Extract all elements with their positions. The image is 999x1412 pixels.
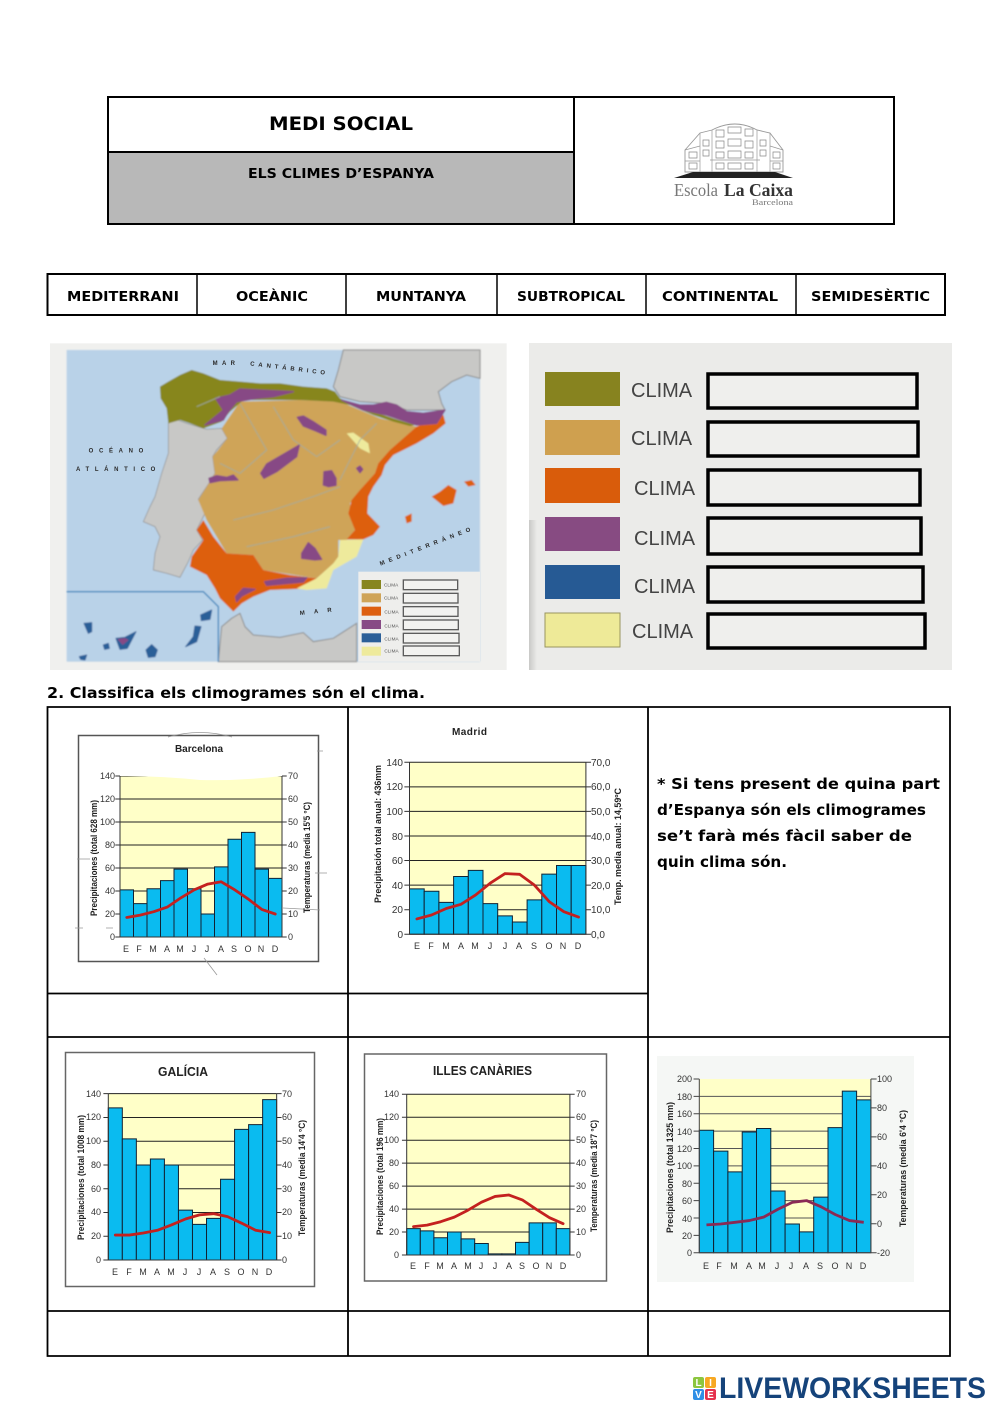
right axis labels — [877, 1074, 892, 1258]
word: semidesèrtic: SEMIDESÈRTIC — [811, 288, 930, 305]
legend swatches — [545, 372, 620, 647]
right axis labels: 50 — [288, 817, 298, 827]
logo text: Escola — [674, 180, 718, 200]
note text: quin clima són. — [657, 853, 787, 871]
chart title: ILLES CANÀRIES — [433, 1063, 532, 1078]
climograph: unnamed high rainfall — [657, 1056, 914, 1282]
watermark icon: I — [709, 1378, 712, 1389]
plot — [402, 1094, 575, 1255]
header table — [108, 97, 894, 224]
logo: Escola La Caixa — [674, 124, 794, 207]
left axis labels: 120 — [384, 1112, 399, 1122]
word: muntanya: MUNTANYA — [376, 289, 467, 305]
legend labels: CLIMA — [634, 576, 696, 598]
left axis labels: 160 — [677, 1109, 692, 1119]
month labels: EFMAMJJASOND — [414, 941, 582, 951]
left axis labels: 80 — [682, 1179, 692, 1189]
right axis labels: 50 — [282, 1136, 292, 1146]
note text: d’Espanya són els climogrames — [657, 801, 926, 819]
right axis labels: 30,0 — [591, 856, 611, 867]
left axis labels: 100 — [100, 817, 115, 827]
left axis labels: 180 — [677, 1092, 692, 1102]
map inset legend — [362, 580, 459, 656]
left axis labels: 120 — [86, 1112, 101, 1122]
right axis labels: 40,0 — [591, 832, 611, 843]
right axis labels: 40 — [282, 1160, 292, 1170]
right axis labels: 0 — [576, 1250, 581, 1260]
month labels: EFMAMJJASOND — [703, 1261, 867, 1271]
map inset legend: CLIMA — [384, 636, 399, 641]
note text: * Si tens present de quina part — [657, 775, 941, 793]
right axis labels: 70 — [282, 1089, 292, 1099]
map label: Mediterráneo: MEDITERRÁNEO — [379, 526, 472, 568]
plot — [115, 776, 287, 937]
left axis labels: 40 — [91, 1207, 101, 1217]
plot — [694, 1079, 877, 1253]
left axis labels: 20 — [389, 1227, 399, 1237]
left axis labels: 120 — [100, 794, 115, 804]
right axis labels: 30 — [282, 1184, 292, 1194]
right axis title: Temperaturas (media 18'7 °C) — [589, 1120, 599, 1232]
right axis labels: 0 — [288, 932, 293, 942]
left axis labels: 100 — [386, 807, 403, 818]
left axis labels: 60 — [105, 863, 115, 873]
right axis labels: 10 — [288, 909, 298, 919]
right axis labels: 70 — [576, 1089, 586, 1099]
legend answer boxes — [708, 374, 925, 648]
map inset legend: CLIMA — [384, 609, 399, 614]
climate word bank — [48, 274, 945, 315]
left axis labels — [86, 1089, 101, 1265]
legend labels: CLIMA — [634, 478, 696, 500]
Liveworksheets watermark — [693, 1372, 986, 1405]
left axis labels: 80 — [389, 1158, 399, 1168]
word: oceànic: OCEÀNIC — [236, 288, 308, 305]
climograph table grid — [47, 707, 950, 1356]
right axis title: Temperaturas (media 14'4 °C) — [297, 1120, 307, 1236]
right axis labels: 20 — [288, 886, 298, 896]
map label: Mar Cantàbrico — [213, 360, 326, 377]
left axis labels: 60 — [389, 1181, 399, 1191]
watermark icon: L — [695, 1378, 702, 1389]
left axis labels — [384, 1089, 399, 1260]
right axis labels — [576, 1089, 586, 1260]
word: mediterrani: MEDITERRANI — [67, 289, 179, 305]
right axis title: Temperaturas (media 15'5 °C) — [302, 802, 312, 913]
right axis title: Temp. media anual: 14,59ºC — [613, 788, 623, 905]
left axis labels: 140 — [100, 771, 115, 781]
left axis labels: 120 — [386, 782, 403, 793]
left axis title: Precipitaciones (total 196 mm) — [375, 1118, 385, 1235]
right axis labels: 100 — [877, 1074, 892, 1084]
word: subtropical: SUBTROPICAL — [517, 289, 625, 305]
right axis labels: 0,0 — [591, 930, 605, 941]
left axis title: Precipitación total anual: 436mm — [373, 765, 383, 903]
right axis labels: 20 — [282, 1207, 292, 1217]
left axis labels: 20 — [682, 1231, 692, 1241]
logo: Escola La Caixa: La Caixa — [724, 180, 793, 200]
map label: Mar: MAR — [300, 608, 333, 617]
watermark wordmark: LIVEWORKSHEETS — [719, 1372, 986, 1405]
plot — [404, 762, 591, 934]
right axis labels: 20 — [877, 1190, 887, 1200]
left axis title: Precipitaciones (total 1008 mm) — [76, 1115, 86, 1240]
note text — [657, 775, 941, 871]
left axis labels: 100 — [86, 1136, 101, 1146]
right axis labels: 40 — [576, 1158, 586, 1168]
right axis labels: 10 — [576, 1227, 586, 1237]
left axis labels: 40 — [392, 881, 403, 892]
map label: Océano Atlántico — [76, 447, 156, 473]
map inset legend: CLIMA — [384, 649, 399, 654]
right axis labels: 60 — [288, 794, 298, 804]
title: MEDI SOCIAL — [269, 113, 413, 135]
right axis labels: -20 — [877, 1248, 890, 1258]
watermark icon: E — [707, 1390, 714, 1401]
word: continental: CONTINENTAL — [662, 289, 778, 305]
legend labels: CLIMA — [632, 621, 694, 643]
left axis labels: 0 — [687, 1248, 692, 1258]
right axis labels: 40 — [877, 1161, 887, 1171]
left axis labels — [100, 771, 115, 942]
right axis title: Temperaturas (media 6'4 °C) — [898, 1110, 908, 1227]
right axis labels: 60 — [282, 1112, 292, 1122]
chart title: Madrid — [452, 727, 487, 738]
left axis labels: 40 — [389, 1204, 399, 1214]
climograph: Madrid — [373, 727, 623, 951]
legend labels: CLIMA — [634, 528, 696, 550]
right axis labels: 0 — [282, 1255, 287, 1265]
left axis labels: 140 — [386, 758, 403, 769]
chart title: Barcelona — [175, 744, 223, 755]
left axis labels: 140 — [677, 1127, 692, 1137]
chart title: GALÍCIA — [158, 1064, 209, 1079]
right axis labels: 70,0 — [591, 758, 611, 769]
left axis labels: 140 — [86, 1089, 101, 1099]
left axis labels: 20 — [105, 909, 115, 919]
right axis labels: 60 — [877, 1132, 887, 1142]
right axis labels: 80 — [877, 1103, 887, 1113]
left axis title: Precipitaciones (total 1325 mm) — [665, 1102, 675, 1233]
left axis labels: 80 — [91, 1160, 101, 1170]
plot — [103, 1094, 282, 1260]
left axis labels: 100 — [677, 1161, 692, 1171]
left axis labels: 120 — [677, 1144, 692, 1154]
left axis labels: 60 — [682, 1196, 692, 1206]
right axis labels — [282, 1089, 292, 1265]
left axis labels: 20 — [392, 905, 403, 916]
large climate legend — [529, 343, 952, 670]
legend labels: CLIMA — [631, 428, 693, 450]
left axis labels: 80 — [392, 832, 403, 843]
map inset legend: CLIMA — [384, 582, 399, 587]
left axis labels: 60 — [91, 1184, 101, 1194]
map label: Mar Cantàbrico: CANTÁBRICO — [250, 360, 326, 377]
left axis labels: 80 — [105, 840, 115, 850]
note text: se’t farà més fàcil saber de — [657, 827, 912, 845]
left axis labels: 200 — [677, 1074, 692, 1084]
right axis labels: 40 — [288, 840, 298, 850]
logo: Escola La Caixa: Barcelona — [752, 198, 794, 207]
left axis labels: 60 — [392, 856, 403, 867]
left axis labels: 100 — [384, 1135, 399, 1145]
left axis title: Precipitaciones (total 628 mm) — [89, 800, 99, 916]
right axis labels — [288, 771, 298, 942]
left axis labels: 40 — [105, 886, 115, 896]
legend labels — [631, 380, 696, 643]
right axis labels — [591, 758, 611, 941]
subtitle: ELS CLIMES D’ESPANYA — [248, 166, 435, 182]
right axis labels: 50,0 — [591, 807, 611, 818]
right axis labels: 60 — [576, 1112, 586, 1122]
right axis labels: 10,0 — [591, 905, 611, 916]
left axis labels: 0 — [397, 930, 403, 941]
right axis labels: 30 — [288, 863, 298, 873]
month labels: EFMAMJJASOND — [410, 1261, 567, 1271]
legend labels: CLIMA — [631, 380, 693, 402]
map inset legend: CLIMA — [384, 623, 399, 628]
question heading: 2. Classifica els climogrames són el clima. — [47, 684, 425, 702]
month labels: EFMAMJJASOND — [123, 944, 279, 954]
right axis labels: 10 — [282, 1231, 292, 1241]
left axis labels: 0 — [394, 1250, 399, 1260]
right axis labels: 30 — [576, 1181, 586, 1191]
right axis labels: 20 — [576, 1204, 586, 1214]
map inset legend: CLIMA — [384, 596, 399, 601]
right axis labels: 0 — [877, 1219, 882, 1229]
left axis labels: 0 — [96, 1255, 101, 1265]
right axis labels: 20,0 — [591, 881, 611, 892]
right axis labels: 60,0 — [591, 782, 611, 793]
left axis labels: 0 — [110, 932, 115, 942]
right axis labels: 70 — [288, 771, 298, 781]
right axis labels: 50 — [576, 1135, 586, 1145]
left axis labels: 20 — [91, 1231, 101, 1241]
map label: Océano Atlántico: OCÉANO — [89, 447, 144, 455]
watermark icon — [693, 1377, 716, 1401]
left axis labels: 140 — [384, 1089, 399, 1099]
watermark icon: V — [695, 1390, 702, 1401]
month labels: EFMAMJJASOND — [112, 1267, 273, 1277]
left axis labels — [386, 758, 403, 941]
left axis labels: 40 — [682, 1214, 692, 1224]
map label: Océano Atlántico: ATLÁNTICO — [76, 466, 156, 473]
climograph: Galícia — [66, 1052, 314, 1286]
climograph: Illes Canàries — [364, 1054, 606, 1281]
map label: Mar Cantàbrico: MAR — [213, 361, 236, 367]
climograph: Barcelona — [75, 732, 327, 975]
left axis labels — [677, 1074, 692, 1258]
climate map of Spain — [50, 343, 507, 670]
